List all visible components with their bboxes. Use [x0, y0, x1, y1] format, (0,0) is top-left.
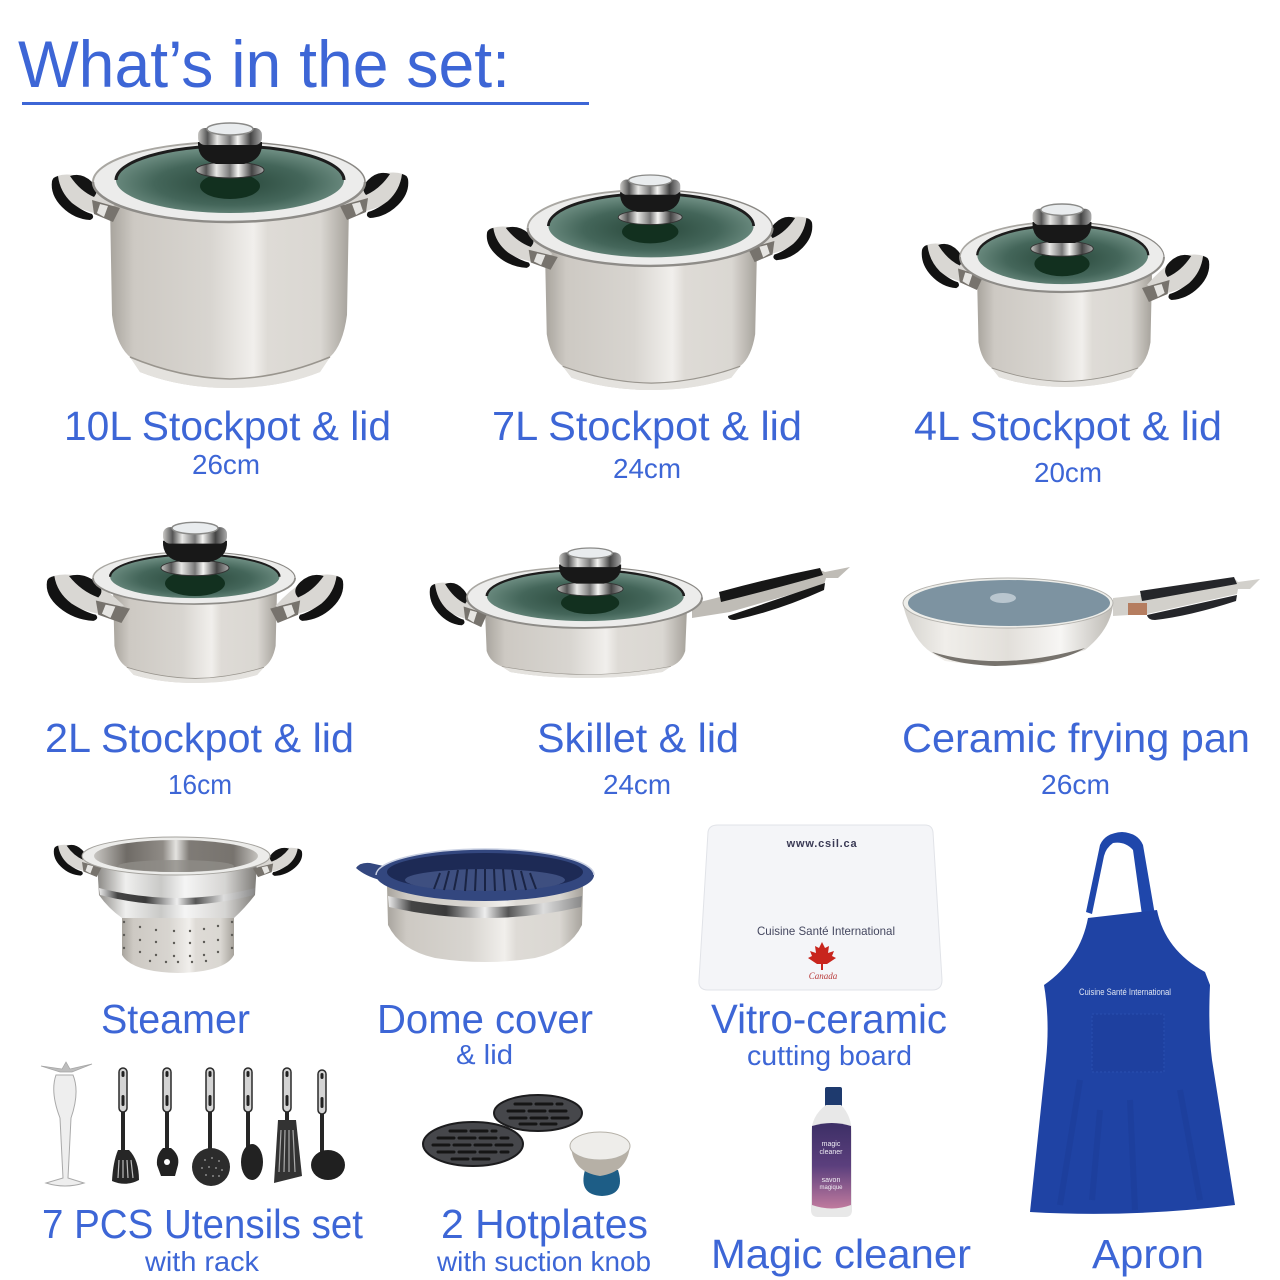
item: skillet	[430, 548, 850, 678]
item: vitro-ceramic cutting board	[699, 825, 942, 990]
label: apron: Apron	[1092, 1231, 1204, 1277]
item: steamer	[54, 837, 302, 973]
label: steamer: Steamer	[101, 996, 250, 1042]
label: skillet: Skillet & lid	[537, 715, 739, 761]
label: 7L stockpot: 7L Stockpot & lid	[492, 403, 802, 449]
item: blue apron: Cuisine Santé International	[1079, 987, 1171, 997]
item: 10L stockpot	[52, 123, 408, 388]
item: vitro-ceramic cutting board: Cuisine Santé International	[757, 924, 895, 938]
label: 2L stockpot: 2L Stockpot & lid	[45, 715, 354, 761]
item: dome cover and lid	[356, 849, 594, 962]
label: vitro-ceramic: Vitro-ceramic	[711, 996, 947, 1042]
size: 20cm: 20cm	[1034, 457, 1102, 488]
size: 16cm: 16cm	[168, 769, 232, 800]
label: utensils set: 7 PCS Utensils set	[42, 1201, 364, 1247]
label: hotplates: 2 Hotplates	[441, 1201, 648, 1247]
item: hotplates and suction knob	[423, 1095, 630, 1196]
item: blue apron	[1030, 832, 1235, 1214]
title: What’s in the set:	[18, 27, 510, 101]
item: 2L stockpot	[47, 522, 343, 683]
item: utensils with rack	[41, 1062, 345, 1186]
label: 4L stockpot: 4L Stockpot & lid	[914, 403, 1222, 449]
sublabel: cutting board: cutting board	[747, 1040, 912, 1071]
sublabel: with rack: with rack	[144, 1246, 260, 1277]
size: 26cm: 26cm	[192, 449, 260, 480]
label: ceramic frying pan: Ceramic frying pan	[902, 715, 1250, 761]
item: magic cleaner bottle: savon	[822, 1177, 840, 1184]
title underline	[22, 102, 589, 105]
item: ceramic frying pan	[903, 577, 1260, 666]
size: 24cm: 24cm	[603, 769, 671, 800]
sublabel: suction knob: with suction knob	[436, 1246, 651, 1277]
sublabel: and lid: & lid	[456, 1039, 513, 1070]
rack	[41, 1062, 92, 1186]
item: magic cleaner bottle: cleaner	[820, 1149, 843, 1156]
label: magic cleaner: Magic cleaner	[711, 1231, 971, 1277]
size: 24cm: 24cm	[613, 453, 681, 484]
item: 7L stockpot	[487, 175, 812, 390]
item: vitro-ceramic cutting board: www.csil.ca	[786, 838, 857, 850]
size: 26cm: 26cm	[1041, 769, 1110, 800]
label: dome cover: Dome cover	[377, 996, 593, 1042]
label: 10L stockpot: 10L Stockpot & lid	[64, 403, 391, 449]
item: magic cleaner bottle	[811, 1087, 852, 1217]
item: magic cleaner bottle: magic	[822, 1141, 841, 1148]
item: magic cleaner bottle: magique	[819, 1185, 843, 1191]
item: 4L stockpot	[922, 204, 1209, 387]
item: vitro-ceramic cutting board: Canada	[809, 971, 838, 981]
